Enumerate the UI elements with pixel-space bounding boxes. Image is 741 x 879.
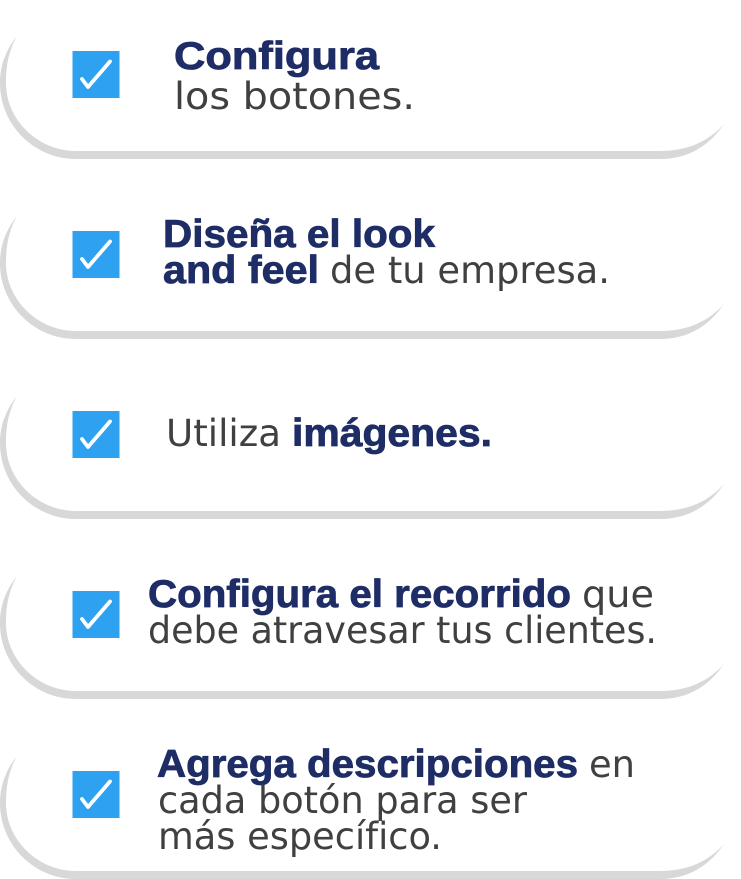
icon: checkbox 1 (72, 51, 120, 98)
text: diseña el look and feel (163, 213, 610, 292)
text: configura los botones: Configura (174, 35, 379, 78)
icon: checkbox 5 (72, 771, 120, 818)
text: configura el recorrido: debe atravesar tus clientes. (148, 609, 657, 652)
text: agrega descripciones: Agrega descripciones (157, 743, 578, 786)
text: utiliza imágenes (166, 412, 492, 455)
text: configura el recorrido (148, 573, 657, 652)
panel: card 2 (0, 213, 724, 339)
card 5 shadow shape (0, 756, 724, 879)
icon: checkbox 3 (72, 411, 120, 458)
panel: card 4 (0, 573, 724, 699)
card 4 shadow shape (0, 576, 724, 699)
text: utiliza imágenes: imágenes. (292, 412, 492, 455)
text: agrega descripciones: más específico. (158, 815, 442, 858)
text: configura los botones (174, 35, 415, 118)
text: agrega descripciones: en (589, 743, 635, 786)
text: diseña el look and feel: de tu empresa. (330, 249, 610, 292)
icon: checkbox 4 (72, 591, 120, 638)
card 1 shadow shape (0, 36, 724, 159)
text: utiliza imágenes: Utiliza (166, 412, 281, 455)
text: configura el recorrido: que (582, 573, 654, 616)
text: configura el recorrido: Configura el recorrido (148, 573, 571, 616)
text: agrega descripciones (157, 743, 635, 858)
panel: card 5 (0, 743, 724, 879)
panel: card 1 (0, 35, 724, 159)
text: configura los botones: los botones. (174, 75, 415, 118)
text: agrega descripciones: cada botón para ser (158, 779, 528, 822)
icon: checkbox 2 (72, 231, 120, 278)
text: diseña el look and feel: and feel (163, 249, 319, 292)
text: diseña el look and feel: Diseña el look (163, 213, 435, 256)
panel: card 3 (0, 396, 724, 519)
card 2 shadow shape (0, 216, 724, 339)
card 3 shadow shape (0, 396, 724, 519)
